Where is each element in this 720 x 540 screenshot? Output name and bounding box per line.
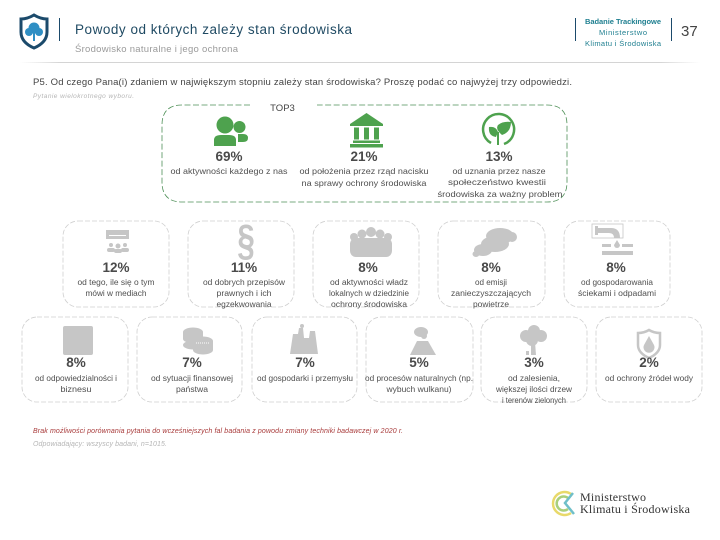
card: 8% local authorities: [313, 221, 419, 309]
card: 11%: 11%: [231, 260, 257, 275]
icon: air conditioner and people: [106, 230, 129, 253]
card: 11%: [188, 216, 294, 309]
icon: paragraph sign: §: [237, 216, 255, 265]
card: 7% finances: od sytuacji finansowej: [151, 373, 233, 383]
card: 5% natural processes: od procesów naturalnych (np.: [365, 373, 473, 383]
card: 11%: egzekwowania: [216, 299, 272, 309]
card: 8% sewage: [564, 221, 670, 307]
item: 21%: na sprawy ochrony środowiska: [302, 178, 427, 188]
study name: Badanie Trackingowe: [585, 17, 661, 26]
icon: factory: [290, 324, 318, 354]
card: 8% sewage: ściekami i odpadami: [578, 288, 656, 298]
icon: volcano: [410, 327, 436, 355]
heading: TOP3: TOP3: [270, 103, 295, 114]
card: 12%: 12%: [102, 260, 130, 275]
card: 8% air emissions: powietrze: [473, 299, 509, 309]
card: 12%: od tego, ile się o tym: [78, 277, 154, 287]
item: 13%: [438, 114, 562, 199]
item: 21%: [300, 113, 429, 188]
card: 7% finances: państwa: [176, 384, 208, 394]
card: 5% natural processes: [365, 317, 473, 402]
card: 3% forestation: [481, 317, 587, 405]
card: 2% water protection: od ochrony źródeł wody: [605, 373, 694, 383]
card: 5% natural processes: 5%: [409, 355, 429, 370]
item: 69%: [170, 116, 288, 176]
card: 8% air emissions: [438, 221, 545, 309]
item: 13%: od uznania przez nasze: [452, 166, 546, 176]
icon: business: [63, 326, 93, 355]
card: 8% air emissions: 8%: [481, 260, 501, 275]
icon: logo emblem: [553, 492, 574, 515]
card: 8% sewage: 8%: [606, 260, 626, 275]
card: 2% water protection: 2%: [639, 355, 659, 370]
subtitle: Środowisko naturalne i jego ochrona: [75, 43, 239, 55]
icon: tree: [520, 325, 547, 355]
card: 3% forestation: większej ilości drzew: [495, 384, 573, 394]
card: 7% finances: [137, 317, 242, 402]
item: 69%: od aktywności każdego z nas: [170, 166, 288, 176]
card: 8% business: biznesu: [60, 384, 92, 394]
card: 8% business: od odpowiedzialności i: [35, 373, 117, 383]
card: 8% local authorities: 8%: [358, 260, 378, 275]
page number: 37: [681, 23, 698, 40]
card: 3% forestation: od zalesienia,: [508, 373, 560, 383]
item: 13%: środowiska za ważny problem: [438, 189, 562, 199]
icon: smoke cloud: [472, 228, 517, 257]
item: 13%: 13%: [485, 149, 513, 164]
card: 7% industry: od gospodarki i przemysłu: [257, 373, 353, 383]
card: 11%: prawnych i ich: [216, 288, 272, 298]
card: 8% air emissions: zanieczyszczających: [451, 288, 531, 298]
icon: shield with tree: [21, 15, 47, 48]
study name: Klimatu i Środowiska: [585, 39, 662, 48]
card: 7% industry: 7%: [295, 355, 315, 370]
card: 12%: [63, 221, 169, 307]
card: 7% industry: [252, 317, 357, 402]
item: 21%: 21%: [350, 149, 378, 164]
card: 8% local authorities: lokalnych w dziedzinie: [329, 288, 409, 298]
question: P5. Od czego Pana(i) zdaniem w największym stopniu zależy stan środowiska? Proszę podać co najwyżej trzy odpowiedzi.: [33, 77, 572, 88]
card: 8% business: [22, 317, 128, 402]
footnote: comparability note: Brak możliwości porównania pytania do wcześniejszych fal badania z powodu zmiany techniki badawczej w 2020 r.: [33, 428, 403, 435]
icon: coins: [183, 328, 213, 354]
logo: Ministerstwo Klimatu i Środowiska: Klimatu i Środowiska: [580, 502, 691, 516]
icon: crowd: [350, 227, 392, 257]
card: 3% forestation: i terenów zielonych: [502, 395, 566, 405]
header: [20, 15, 700, 63]
card: 8% air emissions: od emisji: [475, 277, 507, 287]
title: Powody od których zależy stan środowiska: [75, 22, 352, 37]
item: 69%: 69%: [215, 149, 243, 164]
logo: Ministerstwo Klimatu i Środowiska: [553, 490, 691, 516]
card: 8% local authorities: ochrony środowiska: [331, 299, 407, 309]
card: 12%: mówi w mediach: [86, 288, 147, 298]
card: 11%: od dobrych przepisów: [203, 277, 286, 287]
study name: Ministerstwo: [599, 28, 647, 37]
card: 8% sewage: od gospodarowania: [581, 277, 653, 287]
icon: tap and water: [592, 224, 633, 255]
question note: Pytanie wielokrotnego wyboru.: [33, 93, 134, 100]
card: 3% forestation: 3%: [524, 355, 544, 370]
card: 5% natural processes: wybuch wulkanu): [386, 384, 452, 394]
card: 8% local authorities: od aktywności władz: [330, 277, 408, 287]
study name: [585, 17, 662, 48]
item: 13%: społeczeństwo kwestii: [448, 177, 546, 187]
card: 2% water protection: [596, 317, 702, 402]
card: 7% finances: 7%: [182, 355, 202, 370]
icon: shield with water drop: [638, 330, 660, 358]
item: 21%: od położenia przez rząd nacisku: [300, 166, 429, 176]
logo: Ministerstwo Klimatu i Środowiska: Ministerstwo: [580, 490, 646, 504]
footnote: respondents: Odpowiadający: wszyscy badani, n=1015.: [33, 441, 167, 448]
card: 8% business: 8%: [66, 355, 86, 370]
panel: TOP3: [162, 103, 567, 202]
